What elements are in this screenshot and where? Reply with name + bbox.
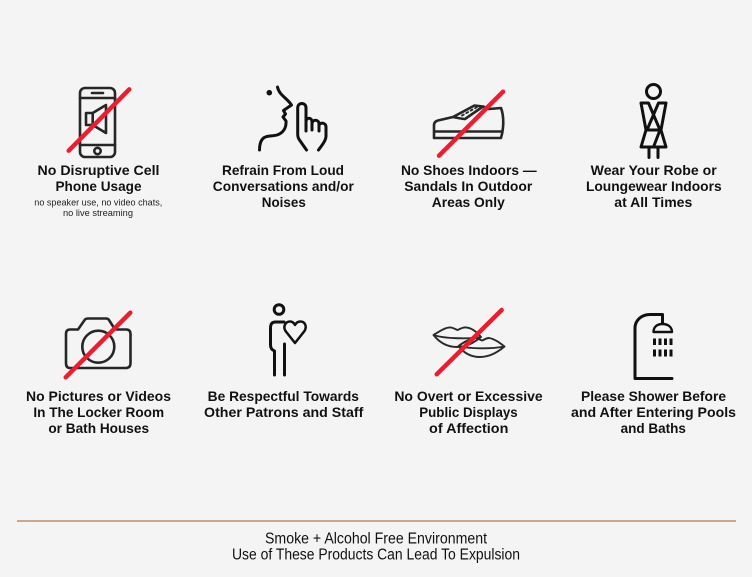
icon: face with finger to lips	[260, 87, 326, 150]
note: speaker, video and streaming limits: no live streaming	[63, 208, 133, 218]
heading: no overt or excessive displays: Public Displays	[419, 404, 518, 420]
icon: crossed-out phone with speaker	[69, 88, 129, 157]
rule: no disruptive cell phone usage	[34, 88, 162, 218]
heading: please shower before and after: Please Shower Before	[581, 388, 726, 404]
rule: refrain from loud noises	[213, 87, 354, 210]
heading: wear your robe or loungewear: Wear Your Robe or	[591, 162, 717, 178]
heading: please shower before and after: and Baths	[621, 420, 686, 436]
heading: no disruptive cell phone usage: No Disruptive Cell	[38, 162, 160, 178]
rule: be respectful	[204, 305, 364, 420]
heading: refrain from loud conversations: Conversations and/or	[213, 178, 354, 194]
heading: no shoes indoors, sandals outdoors: Sandals In Outdoor	[404, 178, 533, 194]
heading: no pictures or videos: No Pictures or Videos	[26, 388, 171, 404]
heading: no shoes indoors, sandals outdoors: Areas Only	[432, 194, 505, 210]
icon: figure in robe	[641, 84, 666, 158]
rule: no public displays of affection	[394, 310, 543, 436]
icon: person with heart	[270, 305, 306, 375]
icon: crossed-out lips	[434, 310, 504, 374]
heading: refrain from loud conversations: Refrain From Loud	[222, 162, 344, 178]
heading: no overt or excessive displays: of Affection	[429, 420, 508, 436]
heading: refrain from loud conversations: Noises	[262, 194, 306, 210]
rule: please shower	[571, 314, 736, 436]
heading: be respectful towards patrons and staff: Be Respectful Towards	[208, 388, 359, 404]
footer note: smoke and alcohol free: Smoke + Alcohol Free Environment	[265, 530, 488, 548]
heading: no pictures or videos: In The Locker Room	[33, 404, 164, 420]
icon: shower	[635, 314, 672, 378]
heading: no pictures or videos: or Bath Houses	[48, 420, 149, 436]
note: speaker, video and streaming limits: no speaker use, no video chats,	[34, 198, 162, 208]
heading: wear your robe or loungewear: Loungewear Indoors	[586, 178, 722, 194]
icon: crossed-out camera	[66, 313, 130, 377]
rule: no pictures or videos	[26, 313, 171, 436]
heading: no disruptive cell phone usage: Phone Usage	[56, 178, 142, 194]
heading: please shower before and after: and After Entering Pools	[571, 404, 736, 420]
rule: wear your robe	[586, 84, 722, 210]
heading: be respectful towards patrons and staff: Other Patrons and Staff	[204, 404, 364, 420]
heading: wear your robe or loungewear: at All Times	[614, 194, 693, 210]
heading: no shoes indoors, sandals outdoors: No Shoes Indoors —	[401, 162, 537, 178]
footer note: smoke and alcohol free: Use of These Products Can Lead To Expulsion	[232, 546, 520, 564]
rule: no shoes indoors	[401, 92, 537, 210]
heading: no overt or excessive displays: No Overt or Excessive	[394, 388, 543, 404]
icon: crossed-out shoe	[434, 92, 503, 156]
